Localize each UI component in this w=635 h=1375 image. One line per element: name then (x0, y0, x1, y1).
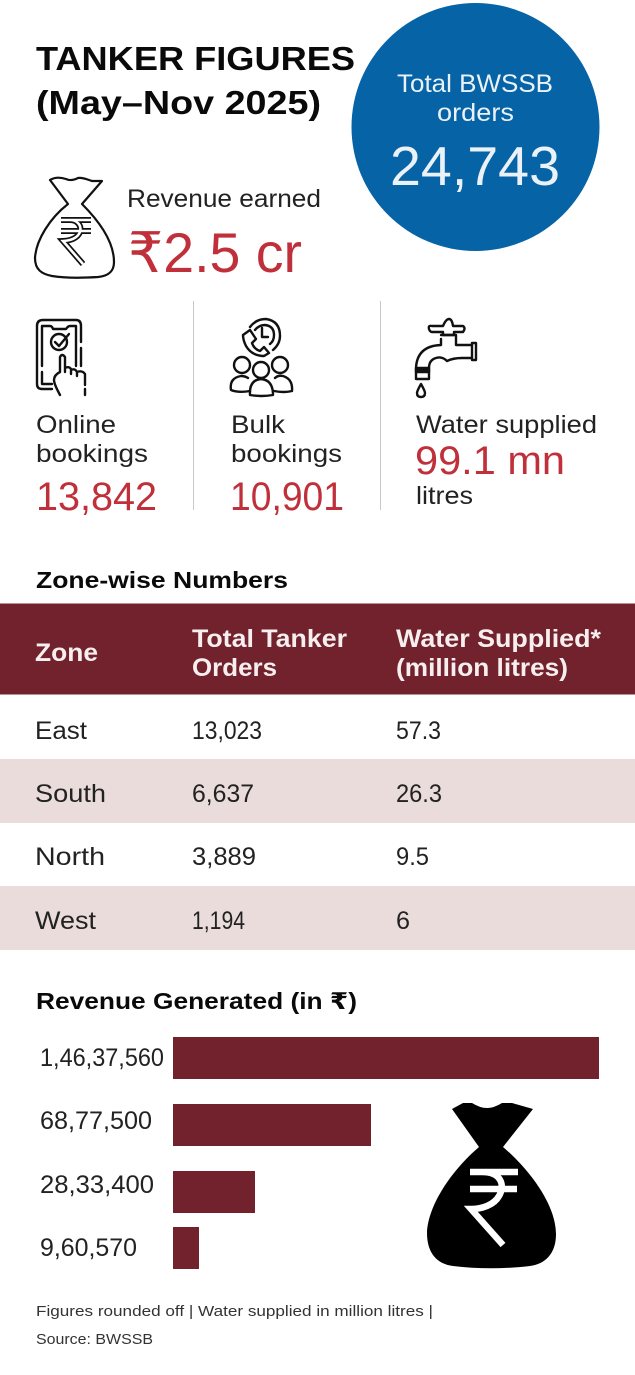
footnote (36, 1303, 433, 1348)
label: Water supplied (416, 411, 597, 439)
row: North: 9.5 (396, 843, 429, 871)
row: West: 6 (396, 907, 410, 935)
callout: total BWSSB orders (352, 3, 600, 251)
title (36, 40, 355, 121)
footnote: Source: BWSSB (36, 1331, 153, 1348)
icon: solid money bag (427, 1103, 556, 1268)
row: North: North (35, 843, 105, 871)
label: bookings (231, 440, 342, 468)
icon: tap with drop (416, 319, 476, 397)
row: West (0, 886, 635, 950)
revenue earned text: Revenue earned (127, 185, 321, 213)
row: North: 3,889 (192, 843, 256, 871)
row: East: East (35, 717, 87, 745)
bar: 9,60,570: 9,60,570 (40, 1234, 137, 1262)
row: East: 13,023 (192, 717, 262, 745)
value: 13,842 (36, 475, 157, 519)
icon: phone tap (37, 320, 85, 395)
label: bookings (36, 440, 148, 468)
table header: (million litres) (396, 654, 568, 682)
footnote: Figures rounded off | Water supplied in million litres | (36, 1303, 433, 1320)
bar chart: revenue generated (40, 1037, 599, 1269)
table header: Zone (35, 639, 98, 667)
panel: bulk bookings (230, 319, 344, 519)
heading: revenue generated: Revenue Generated (in ₹) (36, 988, 357, 1014)
label: Bulk (231, 411, 286, 439)
label: Online (36, 411, 116, 439)
row: West: West (35, 907, 96, 935)
value: 99.1 mn (415, 439, 565, 483)
row: East (35, 717, 441, 745)
callout: total BWSSB orders: Total BWSSB (397, 70, 553, 98)
row: West: 1,194 (192, 907, 245, 935)
icon: money bag outline (35, 178, 114, 278)
callout: total BWSSB orders: 24,743 (390, 135, 560, 197)
callout: total BWSSB orders: orders (437, 99, 514, 127)
bar: 1,46,37,560: 1,46,37,560 (40, 1044, 164, 1072)
row: South: 26.3 (396, 780, 442, 808)
table header (0, 604, 635, 694)
bar: 68,77,500: 68,77,500 (40, 1107, 152, 1135)
revenue earned text (127, 185, 321, 284)
row: East: 57.3 (396, 717, 441, 745)
panel: water supplied (415, 319, 597, 510)
row: South: South (35, 780, 106, 808)
bar: 28,33,400: 28,33,400 (40, 1171, 154, 1199)
table: zone-wise numbers (0, 604, 635, 950)
label (36, 411, 148, 468)
table header: Water Supplied* (396, 625, 601, 653)
value: 10,901 (230, 475, 344, 519)
column dividers (193, 301, 381, 510)
label (231, 411, 342, 468)
table header: Orders (192, 654, 277, 682)
table header: Total Tanker (192, 625, 347, 653)
panel: online bookings (36, 320, 157, 519)
bar: 1,46,37,560 (40, 1037, 599, 1079)
revenue earned text: ₹2.5 cr (128, 221, 302, 284)
icon: phone clock and people (231, 319, 292, 396)
row: North (35, 843, 429, 871)
bar: 9,60,570 (40, 1227, 199, 1269)
unit: litres (416, 482, 473, 510)
row: South (0, 759, 635, 823)
title: (May–Nov 2025) (36, 84, 321, 121)
bar: 28,33,400 (40, 1171, 255, 1213)
heading: zone-wise numbers: Zone-wise Numbers (36, 567, 288, 593)
title: TANKER FIGURES (36, 40, 355, 77)
bar: 68,77,500 (40, 1104, 371, 1146)
row: South: 6,637 (192, 780, 254, 808)
